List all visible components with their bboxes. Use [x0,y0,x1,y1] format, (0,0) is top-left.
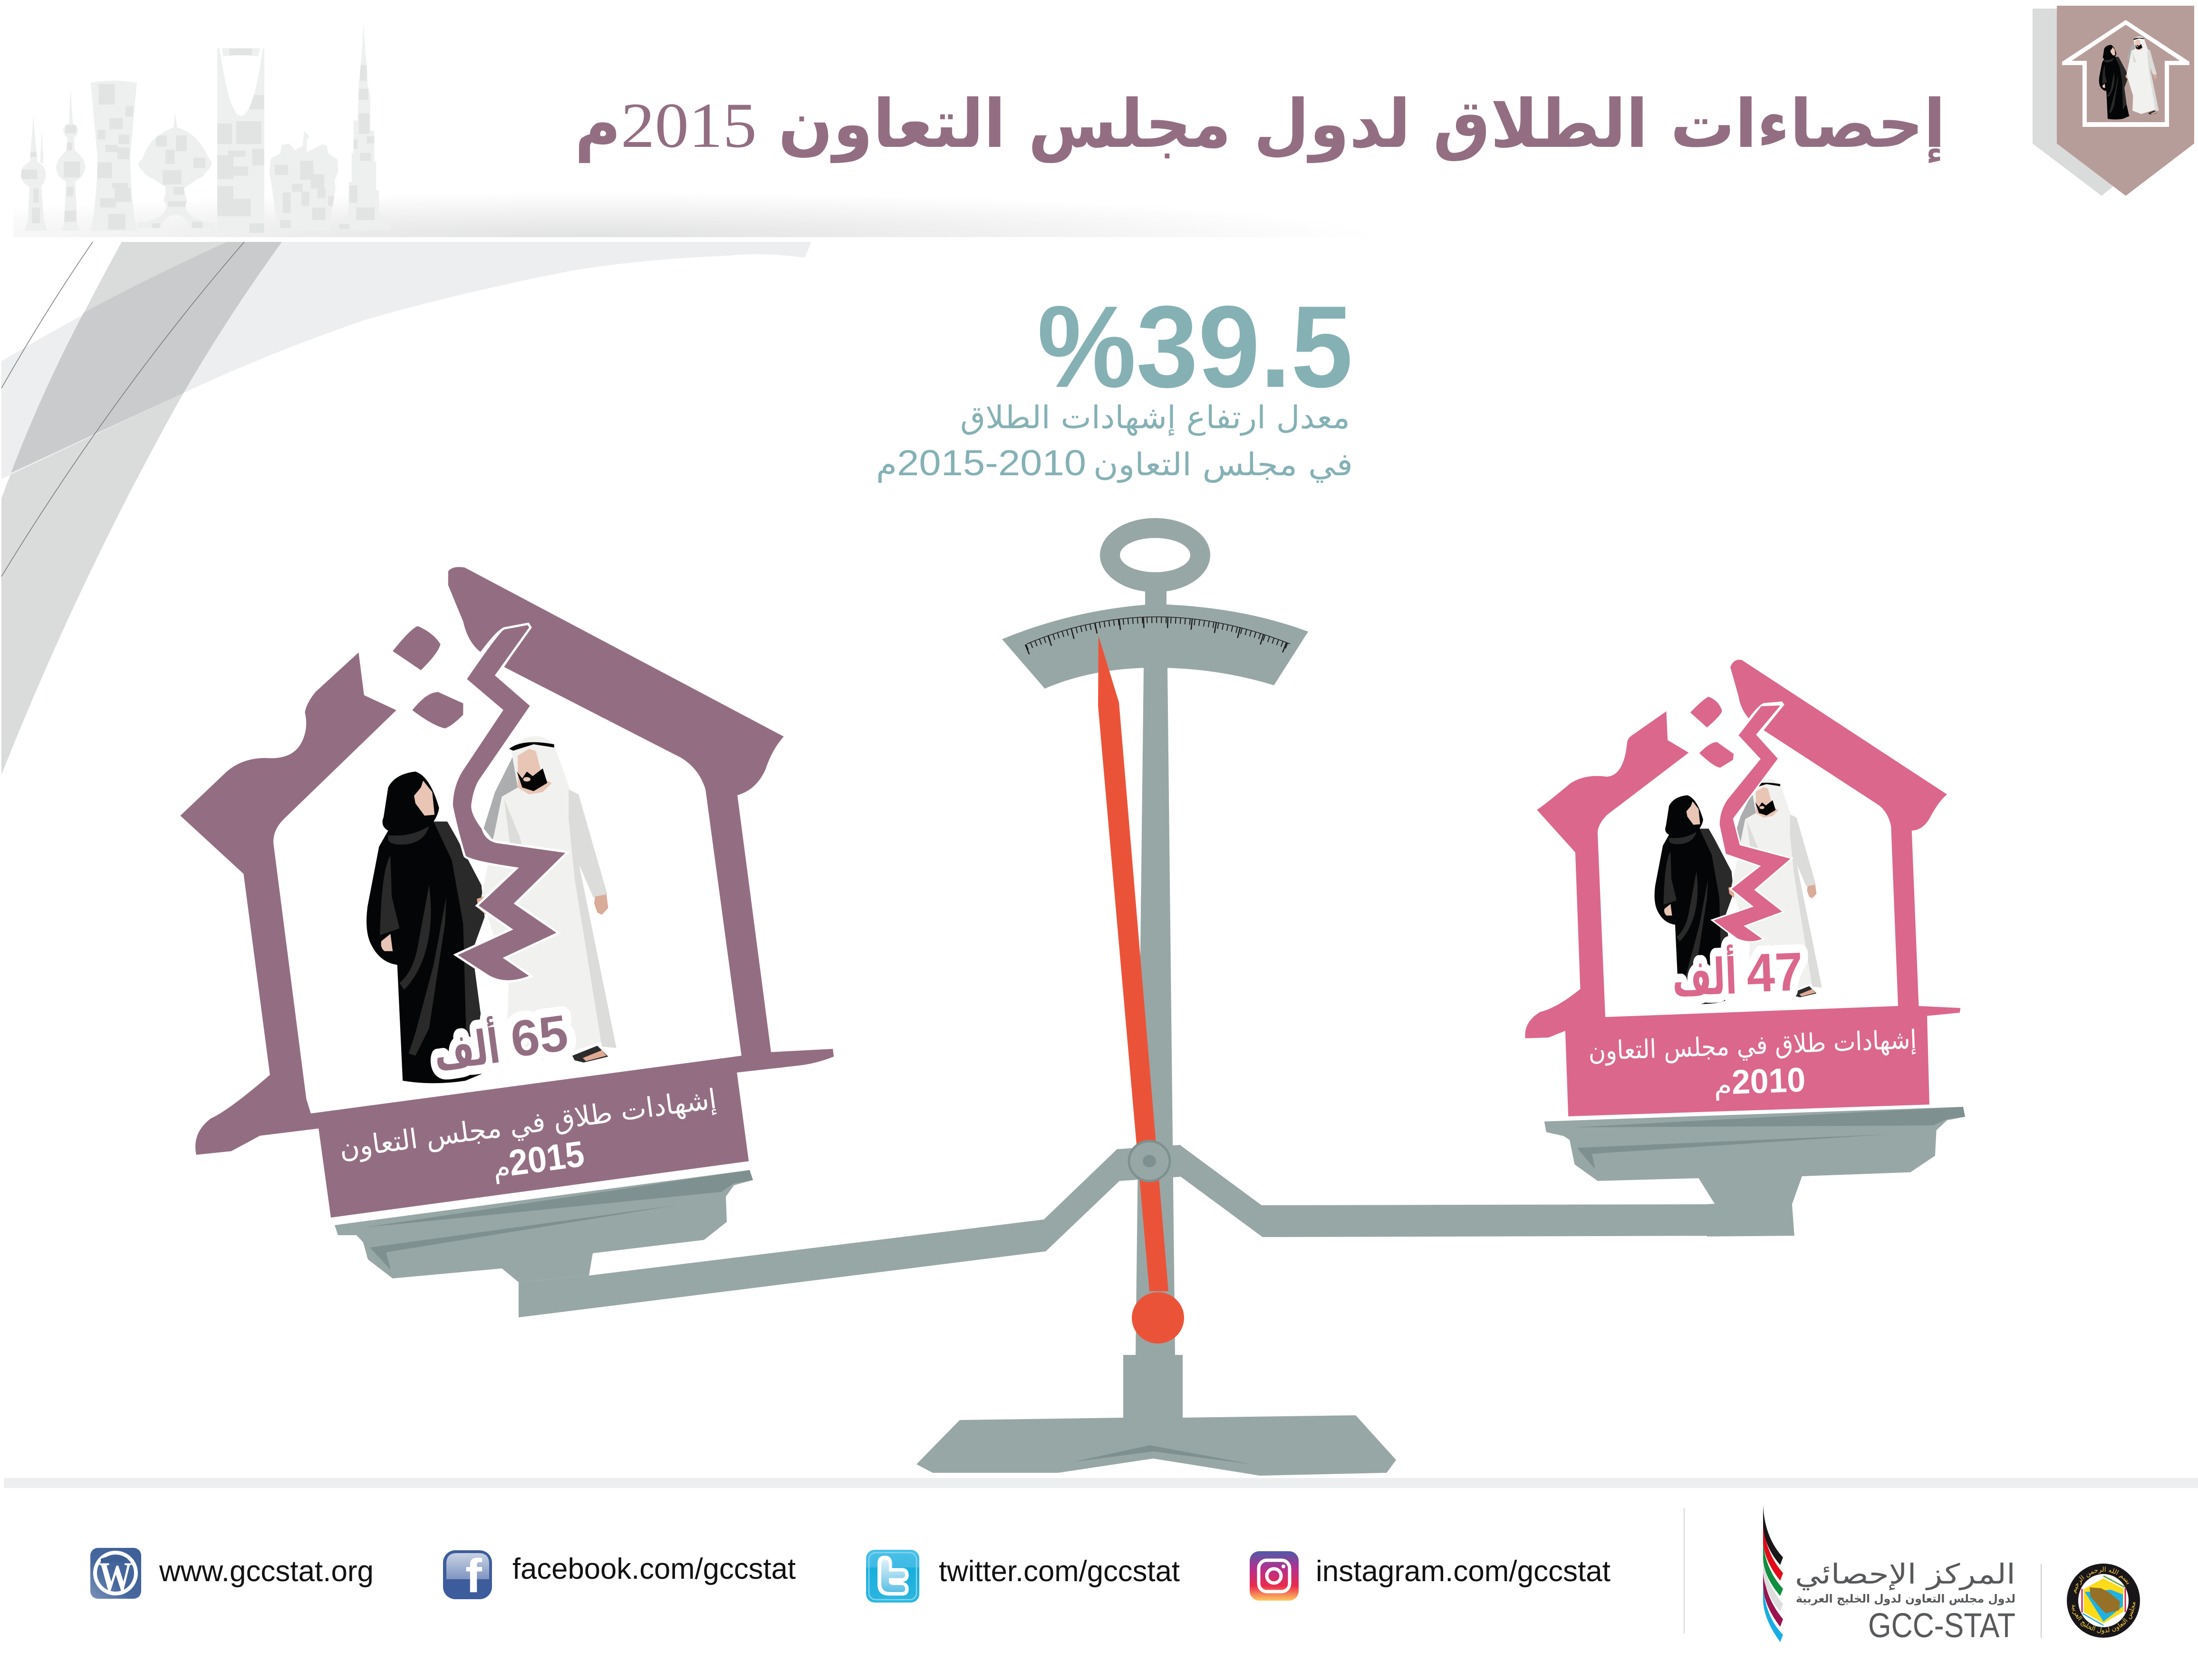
link: website: www.gccstat.org [159,1555,374,1588]
link: twitter: twitter.com/gccstat [939,1555,1180,1588]
left beam arm [519,1145,1181,1317]
panel: house 2010 [1525,660,1960,1116]
subtitle: م [876,446,897,483]
icon: facebook: f [465,1549,482,1603]
header skyline [21,23,390,234]
count: 65 thousand [430,1004,572,1082]
banner caption 2010 [1588,1024,1917,1102]
crack [1712,705,1792,942]
icon: twitter [866,1550,919,1603]
count: 47 thousand: 47 [1745,941,1804,1004]
decorative swoosh [1,242,811,775]
needle [1098,636,1184,1344]
scale stand [916,518,1396,1476]
title: 2015 [621,90,757,161]
logo ribbon [1763,1505,1783,1642]
logo text: GCC-STAT [1868,1607,2015,1645]
subtitle: معدل ارتفاع إشهادات الطلاق [960,399,1350,436]
right beam arm [1180,1145,1764,1237]
emblem: مجلس التعاون لدول الخليج العربية [2070,1601,2137,1634]
figure: man [477,736,617,1063]
link: instagram: instagram.com/gccstat [1316,1555,1610,1588]
title: م [575,86,621,163]
broken house shape [1525,660,1960,1116]
dial tick marks [1027,617,1290,650]
logo text [1795,1558,2015,1645]
figure: man [1728,778,1822,998]
figure: woman [366,772,493,1083]
left scale pan [335,1170,753,1282]
divider: footer logo [1684,1508,1685,1633]
subtitle: في مجلس التعاون [1093,446,1353,483]
title: إحصاءات الطلاق لدول مجلس التعاون [778,86,1946,163]
roof fragments [393,626,463,729]
figure: woman [1655,795,1739,1004]
icon: wordpress: W [99,1554,132,1600]
header shadow gradient [13,190,1382,237]
emblem: بسم الله الرحمن الرحيم [2070,1566,2132,1594]
footer band [4,1478,2198,1488]
banner caption 2015: 2015 [507,1134,587,1184]
panel: house 2015 [180,567,834,1218]
banner caption 2015: إشهادات طلاق في مجلس التعاون [337,1083,718,1165]
subtitle: 2015-2010 [897,443,1086,483]
count: 65 thousand: 65 [507,1004,571,1068]
count: 47 thousand [1671,941,1804,1008]
broken house shape [180,567,834,1218]
count: 47 thousand: ألف [1671,944,1738,1008]
logo text: لدول مجلس التعاون لدول الخليج العربية [1796,1592,2015,1605]
subtitle [876,399,1353,483]
banner caption 2010: م [1713,1070,1733,1101]
pivot hub [1129,1141,1170,1181]
count: 65 thousand: ألف [430,1015,503,1082]
logo text: المركز الإحصائي [1795,1558,2015,1591]
banner caption 2010: 2010 [1731,1061,1806,1102]
icon: house badge [2033,6,2194,196]
emblem [2067,1564,2140,1638]
link: facebook: facebook.com/gccstat [512,1553,796,1585]
crack [452,624,568,981]
headline statistic: %39.5 [1037,281,1353,412]
banner caption 2015: م [491,1151,512,1184]
right scale pan [1544,1107,1965,1237]
banner caption 2010: إشهادات طلاق في مجلس التعاون [1588,1024,1917,1066]
icon: facebook [443,1549,492,1603]
divider: emblem [2041,1564,2042,1638]
icon: instagram [1250,1551,1299,1601]
